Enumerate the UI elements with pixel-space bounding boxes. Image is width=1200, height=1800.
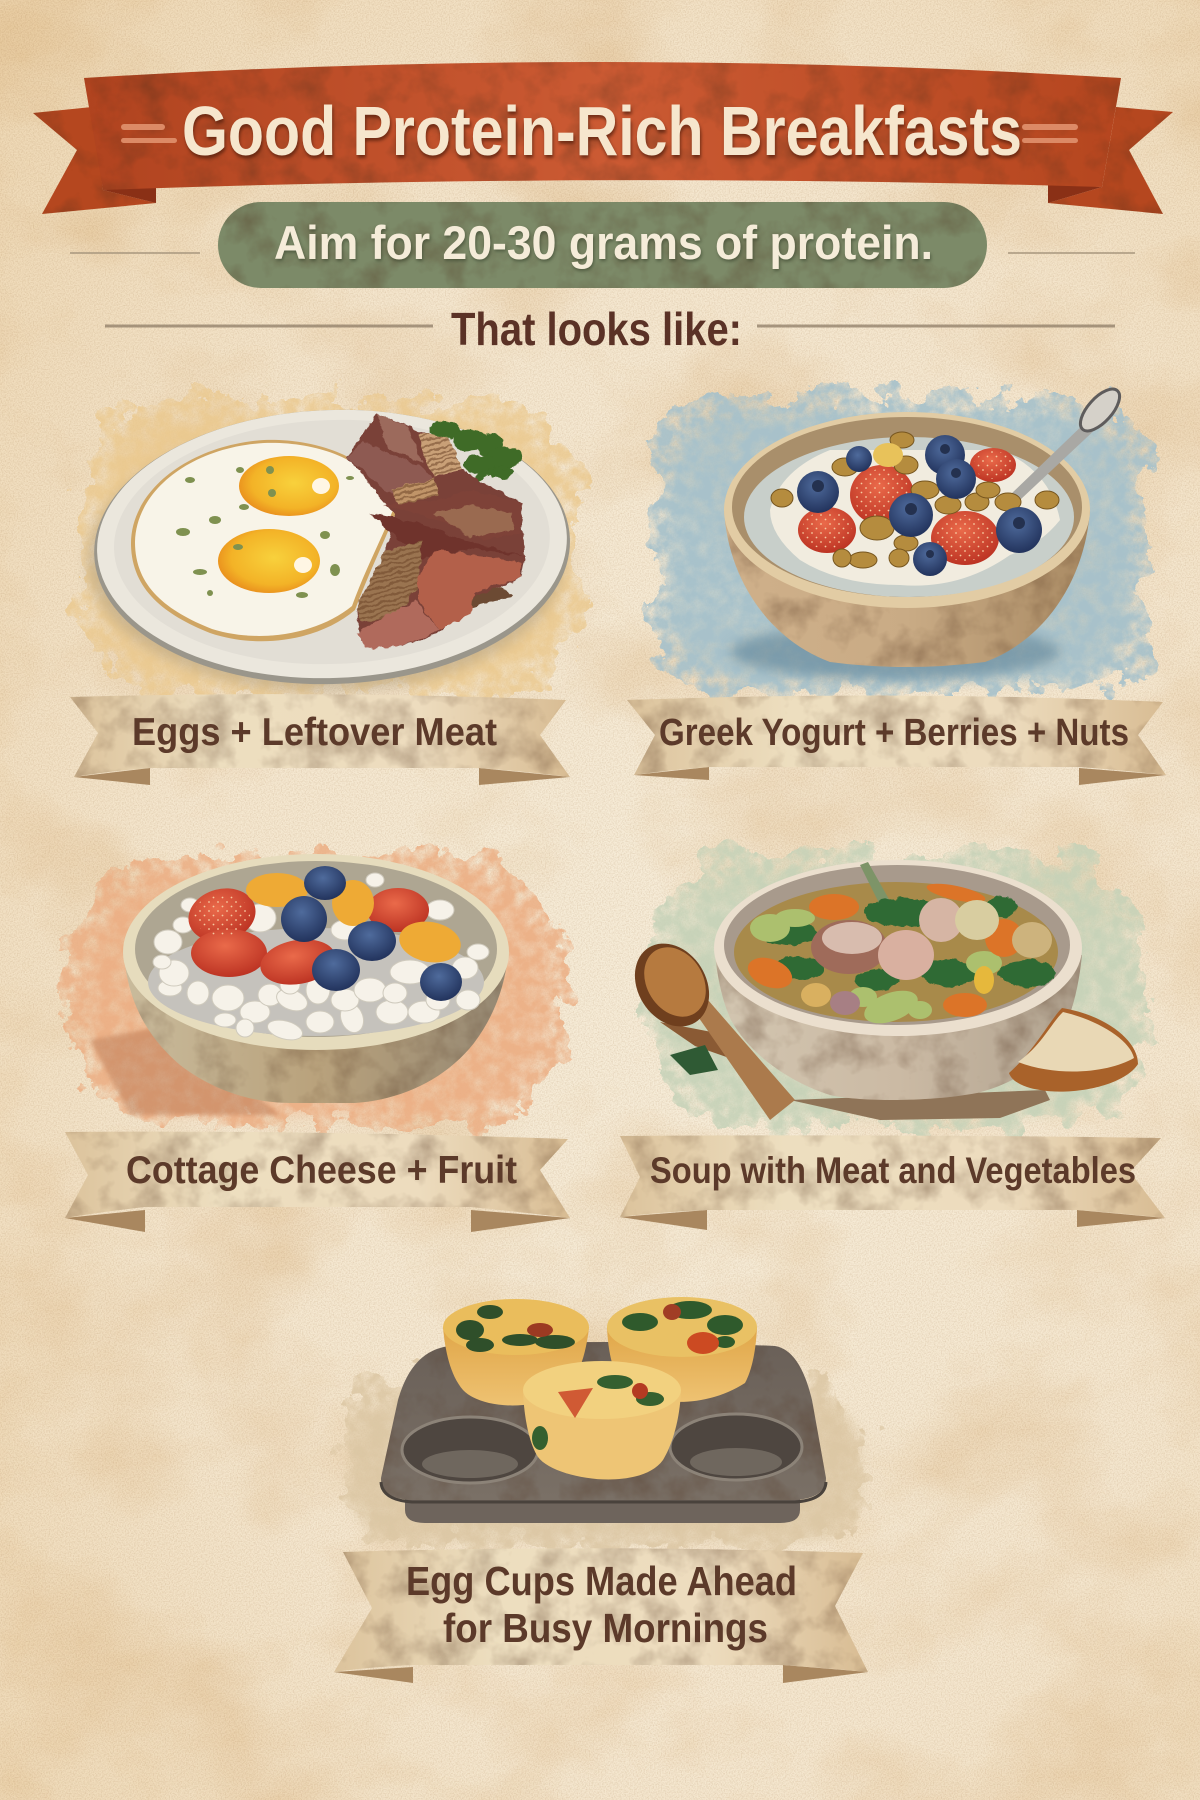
wooden spoon xyxy=(620,930,795,1120)
cottage cheese curds xyxy=(148,873,489,1043)
panel: cottage cheese and fruit xyxy=(65,853,570,1232)
title ribbon xyxy=(33,62,1173,214)
soup broth xyxy=(734,882,1058,1022)
illustration: muffin tin and egg cups xyxy=(381,1297,826,1523)
herb sprig xyxy=(670,1045,718,1075)
yogurt xyxy=(744,437,1074,597)
ribbon main band xyxy=(84,62,1121,190)
watercolor wash xyxy=(645,853,1150,1128)
illustration: yogurt bowl xyxy=(724,383,1126,680)
label text: Greek Yogurt + Berries + Nuts xyxy=(659,712,1129,754)
bread slice xyxy=(1009,1008,1138,1092)
label text: Egg Cups Made Ahead xyxy=(406,1558,797,1604)
strawberries xyxy=(182,881,429,990)
egg cup left xyxy=(443,1299,589,1405)
label: greek yogurt xyxy=(627,695,1166,785)
watercolor wash xyxy=(78,398,583,696)
ribbon right tail xyxy=(1048,107,1173,214)
nuts xyxy=(771,432,1059,568)
panel: greek yogurt berries nuts xyxy=(627,383,1166,785)
watercolor wash xyxy=(65,853,570,1125)
illustration: soup bowl xyxy=(620,860,1138,1120)
spoon xyxy=(1010,383,1126,500)
title ornaments xyxy=(121,124,1078,143)
pineapple piece xyxy=(873,443,903,467)
panel: egg cups xyxy=(334,1297,868,1683)
subtitle text: Aim for 20-30 grams of protein. xyxy=(274,216,933,269)
fried egg white xyxy=(131,440,397,641)
label: soup xyxy=(620,1135,1165,1230)
leftover meat xyxy=(347,413,525,648)
egg cup right xyxy=(607,1297,757,1402)
soup vegetables and meat xyxy=(744,862,1055,1030)
panel: soup with meat and vegetables xyxy=(620,853,1165,1230)
blueberries xyxy=(797,435,1042,576)
title text: Good Protein-Rich Breakfasts xyxy=(182,92,1022,170)
bowl xyxy=(90,854,509,1115)
wooden board under bowl xyxy=(790,1090,1050,1120)
herb flecks xyxy=(176,466,354,598)
egg cup front xyxy=(523,1361,681,1479)
strawberries xyxy=(798,448,1016,565)
plate xyxy=(87,402,575,692)
empty cups xyxy=(402,1414,802,1483)
label text: Eggs + Leftover Meat xyxy=(132,711,497,754)
yolk top xyxy=(239,456,339,516)
panel: eggs and leftover meat xyxy=(70,398,583,785)
yolk bottom xyxy=(218,529,320,593)
bowl xyxy=(714,860,1082,1100)
parsley xyxy=(429,421,523,486)
label: cottage cheese xyxy=(65,1132,570,1232)
mango pieces xyxy=(246,873,464,967)
subtitle pill xyxy=(70,202,1135,288)
watercolor wash xyxy=(650,396,1150,692)
illustration: plate of eggs and meat xyxy=(87,402,575,692)
label text: Cottage Cheese + Fruit xyxy=(126,1149,517,1192)
blueberries xyxy=(281,866,462,1001)
bowl xyxy=(724,412,1090,680)
ribbon left tail xyxy=(33,107,156,214)
label: egg cups xyxy=(334,1548,868,1683)
label text: Soup with Meat and Vegetables xyxy=(650,1150,1136,1191)
label: eggs and leftover meat xyxy=(70,694,570,785)
muffin tin xyxy=(381,1342,826,1523)
illustration: cottage cheese bowl xyxy=(90,854,509,1115)
watercolor wash xyxy=(345,1375,865,1545)
label text: for Busy Mornings xyxy=(443,1605,768,1651)
lead-in text: That looks like: xyxy=(451,303,742,355)
